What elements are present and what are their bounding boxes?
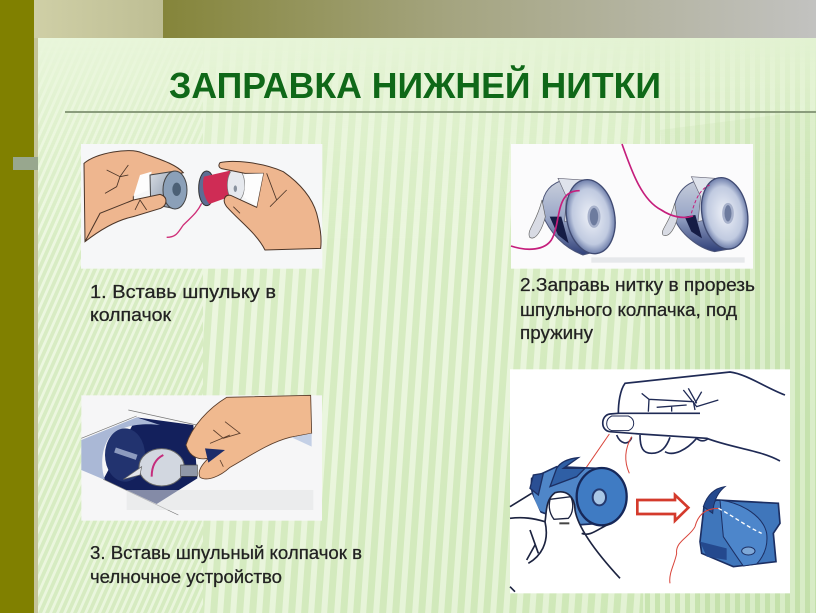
machine plate [103, 417, 197, 504]
sidebar light edge [34, 38, 38, 613]
left bobbin case [511, 176, 621, 258]
illustration 3: case placed into shuttle [81, 395, 322, 521]
small grey accent block [13, 157, 38, 170]
right bobbin case [622, 144, 753, 253]
title: ЗАПРАВКА НИЖНЕЙ НИТКИ [169, 64, 661, 106]
thread [167, 203, 202, 237]
title underline [65, 111, 816, 113]
red outlined arrow [637, 495, 688, 521]
finished case on the right [700, 500, 780, 567]
caption 1: колпачок [90, 305, 171, 325]
left olive sidebar [0, 0, 34, 613]
top olive-to-grey header band [163, 0, 816, 38]
lower hand with thumb [510, 492, 620, 580]
bobbin case in hand [139, 449, 184, 486]
illustration 2: threading the bobbin case [511, 144, 753, 269]
upper hand outline [603, 372, 785, 461]
red threads [585, 434, 632, 473]
caption 2: пружину [520, 323, 593, 343]
caption 1 [90, 282, 276, 325]
caption 2: шпульного колпачка, под [520, 300, 738, 320]
caption 2: 2.Заправь нитку в прорезь [520, 275, 755, 295]
illustration 1: bobbin inserted into case [81, 144, 322, 269]
hand [186, 395, 312, 479]
thread spool [199, 171, 215, 206]
left hand back [84, 151, 183, 242]
bobbin case [150, 171, 175, 209]
caption 3 [90, 543, 362, 587]
blue bobbin case [531, 467, 600, 525]
caption 3: 3. Вставь шпульный колпачок в [90, 543, 362, 563]
left thumb [85, 194, 166, 242]
illustration 4: blue bobbin case and arrow [510, 369, 790, 593]
faint reversed print text [591, 257, 745, 263]
finger creases [105, 165, 287, 213]
caption 2 [520, 275, 755, 343]
caption 1: 1. Вставь шпульку в [90, 282, 276, 302]
top beige header block [34, 0, 163, 38]
caption 3: челночное устройство [90, 567, 282, 587]
right hand [219, 161, 321, 250]
